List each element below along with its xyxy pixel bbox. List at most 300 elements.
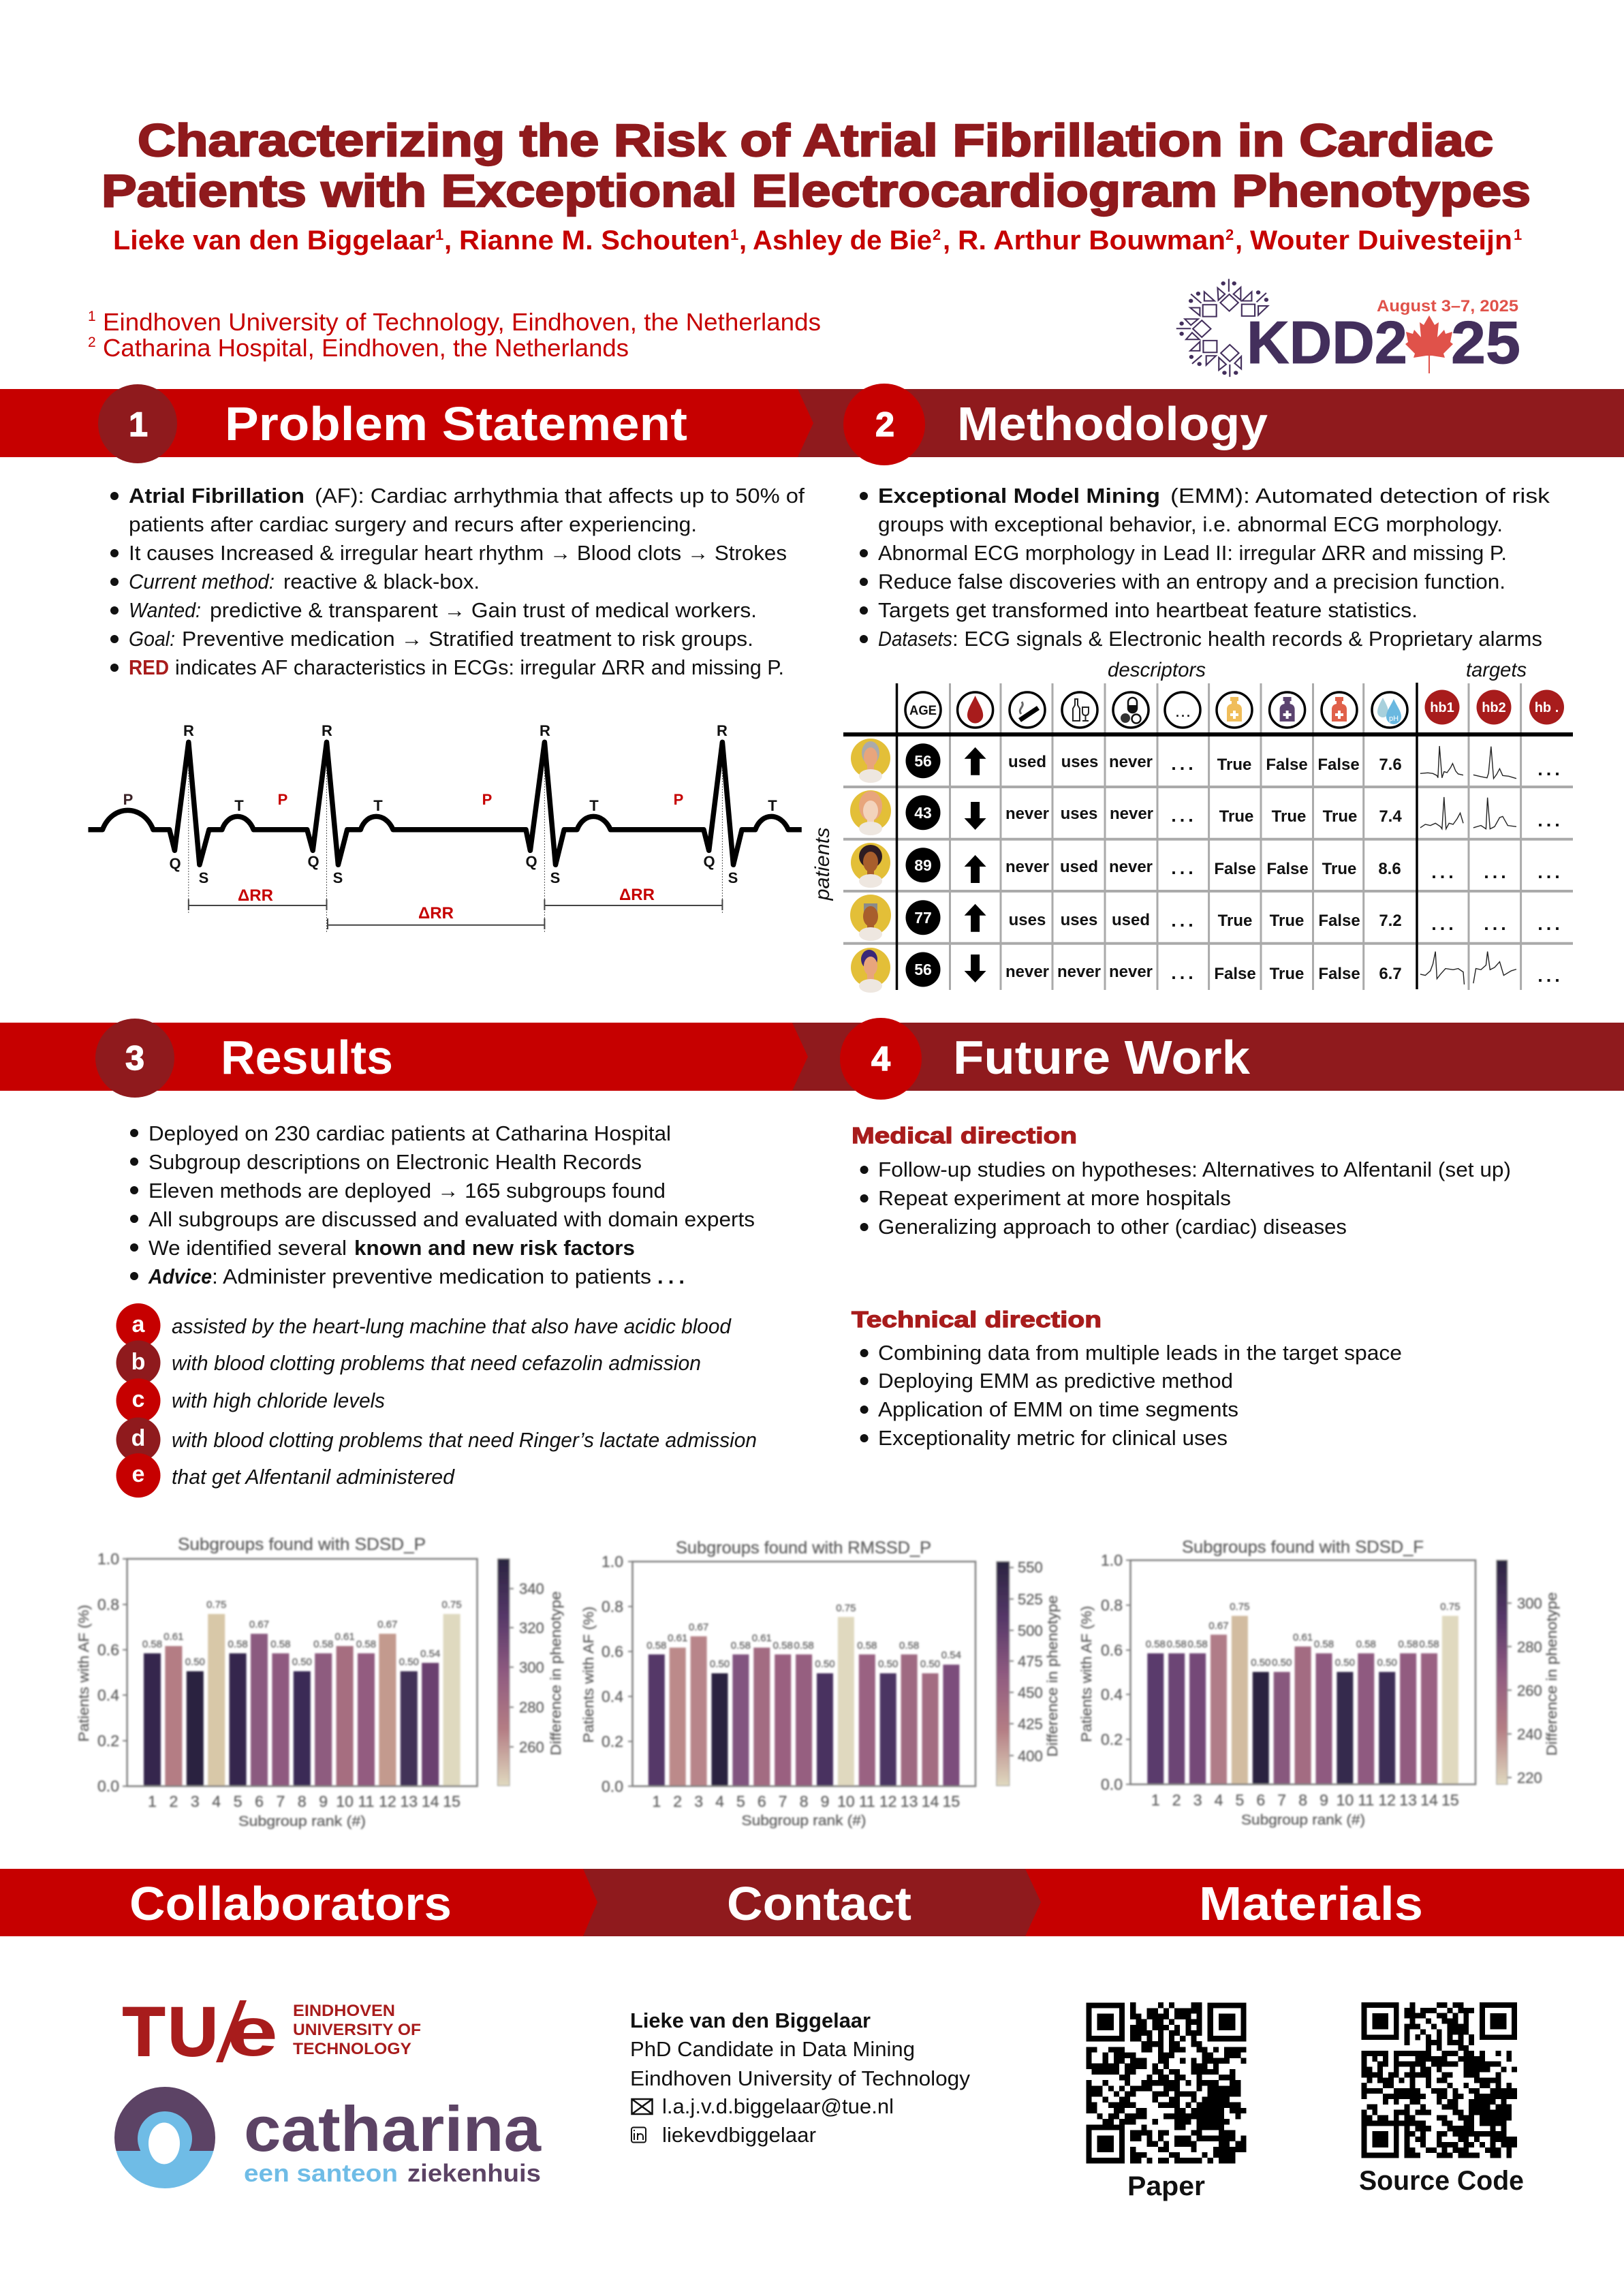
bar chart: SDSD_P: 3: [191, 1793, 200, 1810]
bar chart: RMSSD_P: 9: [821, 1793, 829, 1810]
bar chart: RMSSD_P: 0.54: [941, 1649, 961, 1661]
bar chart: SDSD_P: 0.50: [185, 1656, 205, 1668]
title: [102, 115, 1531, 217]
bar chart: SDSD_F: 260: [1517, 1682, 1542, 1699]
text block: problem statement bullets: [110, 484, 805, 679]
bar chart: RMSSD_P: 0.61: [752, 1632, 772, 1644]
descriptor values: 7.6: [1379, 756, 1402, 774]
medical direction bullets: Repeat experiment at more hospitals: [878, 1186, 1231, 1210]
age badges: [906, 743, 940, 987]
text block: problem statement bullets: Atrial Fibrillation: [129, 484, 304, 508]
bar chart: SDSD_P: 0.54: [420, 1648, 440, 1660]
authors: ,: [943, 226, 950, 255]
title: Characterizing the Risk of Atrial Fibrillation in Cardiac: [138, 115, 1493, 166]
bar chart: SDSD_F: 10: [1337, 1791, 1354, 1809]
target badges: hb .: [1535, 700, 1559, 715]
bar chart: RMSSD_P: 0.58: [857, 1640, 877, 1651]
bar chart: RMSSD_P: 10: [837, 1793, 855, 1810]
QR code: Source Code: [1359, 2002, 1524, 2196]
wave labels: R: [322, 722, 332, 739]
bar chart: SDSD_F: 4: [1215, 1791, 1223, 1809]
item c: c: [132, 1386, 144, 1412]
icon: age: [905, 692, 941, 728]
age badges: 77: [914, 909, 932, 927]
bar chart: RMSSD_P: 0.2: [602, 1733, 623, 1750]
bar chart: SDSD_P: 0.2: [97, 1732, 119, 1750]
bar chart: RMSSD_P: 1.0: [602, 1553, 623, 1570]
text block: problem statement bullets: indicates AF characteristics in ECGs: irregular ΔRR and missing P.: [175, 655, 784, 679]
bar chart: SDSD_F: Difference in phenotype: [1544, 1592, 1560, 1756]
text block: methodology bullets: Datasets: [878, 627, 952, 651]
bar chart: RMSSD_P: 0.58: [794, 1640, 814, 1651]
bar chart: SDSD_F: 0.58: [1419, 1639, 1439, 1650]
text block: problem statement bullets: patients after cardiac surgery and recurs after experiencing.: [129, 512, 697, 536]
badge 1: [98, 384, 177, 463]
table grid: [843, 683, 1573, 990]
text block: results bullets: [130, 1121, 755, 1288]
ellipsis cells: ...: [1537, 914, 1563, 934]
badge 2: 2: [875, 405, 894, 444]
icon: email: [632, 2099, 653, 2114]
descriptor values: False: [1214, 965, 1256, 983]
descriptor values: never: [1110, 805, 1153, 823]
wave labels: R: [717, 722, 728, 739]
bar chart: SDSD_F: 2: [1172, 1791, 1181, 1809]
bar chart: RMSSD_P: 3: [694, 1793, 703, 1810]
bar chart: SDSD_P: 0.0: [97, 1778, 119, 1795]
list: risk groups a to e: [116, 1303, 757, 1498]
icon: linkedin: [631, 2127, 646, 2142]
bar chart: SDSD_P: 9: [319, 1793, 328, 1810]
icon: patient 3: [851, 843, 890, 888]
wave labels: P: [123, 791, 133, 808]
item a: a: [132, 1312, 146, 1337]
descriptor values: never: [1057, 963, 1101, 981]
heading: Results: Results: [221, 1031, 393, 1084]
text block: contact details: PhD Candidate in Data Mining: [630, 2037, 915, 2061]
bar chart: SDSD_P: 0.50: [399, 1656, 419, 1668]
bar chart: SDSD_F: 12: [1378, 1791, 1396, 1809]
medical direction bullets: Generalizing approach to other (cardiac) diseases: [878, 1215, 1347, 1239]
bar chart: SDSD_F: 14: [1420, 1791, 1438, 1809]
text block: results bullets: Subgroup descriptions on Electronic Health Records: [149, 1150, 642, 1174]
table headings: [811, 659, 1527, 901]
icon: patient 4: [850, 895, 891, 941]
bar chart: SDSD_P: 0.75: [441, 1599, 462, 1611]
bar chart: RMSSD_P: 0.58: [646, 1640, 666, 1651]
text block: problem statement bullets: Current method:: [129, 570, 275, 593]
wave labels: T: [768, 797, 777, 814]
logo: KDD 2025: [1176, 279, 1520, 377]
bar chart: SDSD_P: 0.4: [97, 1686, 119, 1704]
bar chart: SDSD_P: 11: [358, 1793, 374, 1810]
text block: contact details: l.a.j.v.d.biggelaar@tue.nl: [662, 2094, 894, 2118]
target badges: hb2: [1482, 700, 1506, 715]
bar chart: SDSD_P: 6: [255, 1793, 264, 1810]
authors: Ashley de Bie: [753, 226, 932, 255]
item d: [116, 1417, 757, 1462]
bar chart: SDSD_P: 260: [519, 1739, 544, 1756]
icon: bottle and glass: [1062, 692, 1097, 728]
text block: results bullets: Advice: [148, 1265, 212, 1288]
bar chart: RMSSD_P: 7: [779, 1793, 787, 1810]
bar chart: SDSD_F: 0.75: [1440, 1601, 1461, 1613]
bar chart: SDSD_F: 8: [1298, 1791, 1307, 1809]
bar chart: SDSD_P: 4: [212, 1793, 221, 1810]
descriptor values: never: [1109, 753, 1153, 771]
affiliations: [88, 308, 821, 362]
authors: 1: [730, 226, 738, 243]
ellipsis cells: ...: [1171, 858, 1197, 878]
icon: pH drops: [1372, 692, 1407, 728]
bar chart: SDSD_F: 0.58: [1314, 1639, 1334, 1650]
bar chart: SDSD_P: 340: [519, 1581, 544, 1597]
descriptor values: True: [1322, 860, 1356, 878]
wave labels: Q: [307, 853, 319, 870]
text block: problem statement bullets: predictive & transparent → Gain trust of medical workers.: [210, 598, 757, 622]
bar chart: SDSD_F: 0.4: [1101, 1686, 1123, 1703]
item b: b: [131, 1349, 145, 1375]
bar chart: SDSD_F: 5: [1236, 1791, 1244, 1809]
icon: red medicine bottle: [1322, 692, 1357, 728]
authors: ,: [444, 226, 452, 255]
bar chart: RMSSD_P: 425: [1018, 1716, 1043, 1733]
badge 4: [840, 1018, 922, 1100]
age badges: 56: [914, 752, 932, 770]
heading: Collaborators: Collaborators: [129, 1877, 452, 1930]
bar chart: RMSSD_P: 14: [922, 1793, 939, 1810]
descriptor values: [1005, 753, 1402, 983]
item d: d: [131, 1425, 145, 1451]
bar chart: SDSD_F: 0.50: [1335, 1657, 1355, 1669]
bar chart: SDSD_P: 280: [519, 1699, 544, 1716]
icon: maple leaf: [1405, 315, 1453, 373]
bar chart: SDSD_F: 0.6: [1101, 1641, 1123, 1659]
authors: 2: [1225, 226, 1234, 243]
descriptor values: True: [1270, 912, 1304, 930]
bar chart: SDSD_F: 0.8: [1101, 1596, 1123, 1614]
badge 3: [95, 1019, 174, 1098]
logo: Catharina hospital: [114, 2087, 542, 2188]
icon: age: AGE: [909, 704, 937, 718]
technical direction bullets: Deploying EMM as predictive method: [878, 1369, 1233, 1393]
ECG trace: [89, 742, 802, 865]
descriptor values: used: [1060, 858, 1098, 876]
descriptor values: 8.6: [1378, 860, 1401, 878]
authors: [113, 226, 1522, 255]
age badges: 89: [914, 856, 932, 874]
wave labels: S: [550, 869, 560, 886]
descriptor values: True: [1219, 807, 1253, 826]
technical direction bullets: Application of EMM on time segments: [878, 1397, 1238, 1421]
bar chart: RMSSD_P: 400: [1018, 1748, 1043, 1765]
descriptor values: uses: [1061, 911, 1097, 929]
icon: Catharina mark: [114, 2087, 215, 2188]
bar chart: RMSSD_P: 0.50: [815, 1658, 835, 1670]
tagline: ziekenhuis: [407, 2159, 541, 2187]
heading: Contact: Contact: [727, 1877, 911, 1930]
icon: purple medicine bottle: [1270, 692, 1305, 728]
authors: R. Arthur Bouwman: [958, 226, 1225, 255]
text block: contact details: [630, 2008, 970, 2147]
technical direction bullets: Exceptionality metric for clinical uses: [878, 1426, 1228, 1450]
year digits: 25: [1451, 309, 1520, 376]
bar chart: SDSD_F: 0.58: [1398, 1639, 1418, 1650]
technical direction bullets: [860, 1341, 1402, 1450]
bar chart: SDSD_P: Subgroups found with SDSD_P: [178, 1535, 426, 1554]
title: Patients with Exceptional Electrocardiogram Phenotypes: [102, 166, 1531, 217]
wave labels: S: [728, 869, 738, 886]
authors: Lieke van den Biggelaar: [113, 226, 435, 255]
bar chart: SDSD_P: 0.75: [206, 1599, 226, 1611]
bar chart: SDSD_F: Subgroup rank (#): [1241, 1812, 1365, 1828]
wave labels: P: [278, 791, 287, 808]
bar chart: SDSD_F: 220: [1517, 1769, 1542, 1786]
authors: ,: [739, 226, 747, 255]
icon: patient 5: [851, 948, 890, 993]
bar chart: SDSD_P: 0.50: [292, 1656, 312, 1668]
text block: results bullets: ...: [657, 1265, 685, 1288]
wave labels: Q: [703, 853, 715, 870]
wave labels: P: [482, 791, 492, 808]
icon: other descriptors: ...: [1176, 706, 1192, 719]
icon: KDD snowflake mark: [1176, 279, 1268, 377]
ellipsis cells: ...: [1171, 963, 1197, 983]
target badges: [1425, 689, 1564, 725]
bar chart: RMSSD_P: 550: [1018, 1559, 1043, 1576]
direction arrows: [965, 747, 986, 982]
bar chart: RMSSD_P: 8: [800, 1793, 808, 1810]
text block: problem statement bullets: Goal:: [129, 627, 175, 651]
heading: Materials: Materials: [1199, 1877, 1423, 1930]
icon: yellow medicine bottle: [1217, 692, 1252, 728]
descriptor values: True: [1218, 912, 1252, 930]
bar chart: SDSD_P: 1: [148, 1793, 157, 1810]
wave labels: T: [234, 797, 244, 814]
bar chart: SDSD_P: 0.58: [142, 1639, 162, 1650]
bar chart: SDSD_P: 7: [277, 1793, 285, 1810]
section band: Collaborators, Contact, Materials: [0, 1869, 1624, 1936]
bar chart: SDSD_F: 0.50: [1251, 1657, 1270, 1669]
text block: results bullets: We identified several: [149, 1236, 347, 1260]
bar chart: SDSD_P: 12: [379, 1793, 396, 1810]
bar chart: SDSD_P: [76, 1535, 564, 1829]
bar chart: SDSD_P: 0.58: [228, 1639, 248, 1650]
bar chart: RMSSD_P: 0.6: [602, 1643, 623, 1660]
item e: e: [132, 1461, 144, 1487]
icon: cigarette: [1010, 692, 1045, 728]
item b: with blood clotting problems that need cefazolin admission: [172, 1351, 701, 1375]
bar chart: SDSD_F: 6: [1256, 1791, 1265, 1809]
bar chart: SDSD_F: 7: [1277, 1791, 1286, 1809]
bar chart: SDSD_F: 0.58: [1356, 1639, 1376, 1650]
ellipsis cells: ...: [1537, 965, 1563, 986]
bar chart: RMSSD_P: 0.58: [899, 1640, 919, 1651]
KDD wordmark: KDD2: [1247, 309, 1407, 376]
heading: technical direction: Technical direction: [852, 1307, 1102, 1332]
descriptor values: used: [1112, 911, 1150, 929]
bar chart: SDSD_P: 0.6: [97, 1641, 119, 1658]
bar chart: RMSSD_P: 0.8: [602, 1598, 623, 1615]
text block: contact details: liekevdbiggelaar: [662, 2123, 816, 2147]
bar chart: SDSD_F: 0.2: [1101, 1731, 1123, 1748]
RR interval brackets: ΔRR: [238, 886, 273, 905]
descriptor values: False: [1266, 860, 1309, 878]
bar chart: SDSD_P: 8: [298, 1793, 307, 1810]
heading: Problem Statement: Problem Statement: [225, 397, 687, 450]
bar chart: RMSSD_P: 0.0: [602, 1778, 623, 1795]
logo: TU/e: TECHNOLOGY: [293, 2040, 411, 2058]
target badges: hb1: [1430, 700, 1454, 715]
bar chart: SDSD_P: 0.61: [163, 1631, 184, 1643]
bar chart: SDSD_F: 240: [1517, 1726, 1542, 1743]
bar chart: SDSD_P: 2: [170, 1793, 178, 1810]
icon: pH drops: pH: [1389, 715, 1399, 723]
bar chart: RMSSD_P: Difference in phenotype: [1045, 1596, 1061, 1756]
text block: methodology bullets: Targets get transformed into heartbeat feature statistics.: [878, 598, 1418, 622]
bar chart: SDSD_F: 1.0: [1101, 1551, 1123, 1569]
bar chart: SDSD_P: Difference in phenotype: [548, 1592, 564, 1755]
bar chart: RMSSD_P: 475: [1018, 1653, 1043, 1670]
authors: Rianne M. Schouten: [459, 226, 730, 255]
bar chart: RMSSD_P: 0.4: [602, 1688, 623, 1705]
wordmark: catharina: [244, 2093, 542, 2165]
ellipsis cells: ...: [1484, 862, 1510, 882]
text block: problem statement bullets: It causes Increased & irregular heart rhythm → Blood clots → Strokes: [129, 541, 787, 565]
affiliations: 1: [88, 309, 96, 324]
affiliations: 2: [88, 335, 96, 350]
logo: TU/e: [123, 1993, 421, 2070]
text block: results bullets: All subgroups are discussed and evaluated with domain experts: [149, 1207, 755, 1231]
item d: with blood clotting problems that need Ringer’s lactate admission: [172, 1428, 757, 1452]
wave labels: Q: [169, 855, 181, 872]
affiliations: Eindhoven University of Technology, Eindhoven, the Netherlands: [103, 308, 821, 336]
logo: TU/e: e: [227, 1993, 278, 2070]
badge 2: [843, 384, 925, 465]
badge 4: 4: [871, 1040, 890, 1078]
bar chart: RMSSD_P: 0.50: [710, 1658, 730, 1670]
bar chart: SDSD_F: 0.75: [1230, 1601, 1250, 1613]
ellipsis cells: ...: [1171, 910, 1197, 931]
bar chart: RMSSD_P: 450: [1018, 1684, 1043, 1701]
ellipsis cells: ...: [1431, 914, 1457, 934]
wave labels: T: [373, 797, 383, 814]
icon: blood acidity drop: [958, 692, 993, 728]
bar chart: RMSSD_P: 0.67: [689, 1622, 708, 1633]
bar chart: RMSSD_P: 5: [736, 1793, 745, 1810]
medical direction bullets: [860, 1158, 1511, 1239]
wave labels: S: [333, 869, 343, 886]
table headings: descriptors: [1108, 659, 1206, 681]
bar chart: SDSD_F: 3: [1193, 1791, 1202, 1809]
bar chart: SDSD_F: 300: [1517, 1595, 1542, 1612]
bar chart: RMSSD_P: Subgroup rank (#): [741, 1813, 866, 1829]
bar chart: RMSSD_P: Subgroups found with RMSSD_P: [676, 1538, 931, 1557]
descriptor values: False: [1318, 912, 1360, 930]
descriptor values: uses: [1061, 805, 1097, 823]
bar chart: SDSD_P: 0.58: [313, 1639, 333, 1650]
icon: pills: [1113, 692, 1149, 728]
bar chart: SDSD_P: 0.67: [249, 1619, 269, 1630]
table headings: targets: [1466, 659, 1527, 681]
bar chart: RMSSD_P: 500: [1018, 1622, 1043, 1639]
wave labels: S: [199, 869, 208, 886]
bar chart: RMSSD_P: 11: [859, 1793, 875, 1810]
icon: other descriptors: [1165, 692, 1200, 728]
text block: problem statement bullets: reactive & black-box.: [283, 570, 480, 593]
descriptor values: never: [1005, 858, 1049, 876]
text block: future work: [852, 1123, 1511, 1450]
descriptor values: uses: [1009, 911, 1046, 929]
text block: methodology bullets: (EMM): Automated detection of risk: [1170, 484, 1550, 508]
descriptor values: uses: [1061, 753, 1098, 771]
bar chart: SDSD_F: 0.58: [1167, 1639, 1187, 1650]
bar chart: RMSSD_P: 15: [943, 1793, 960, 1810]
heading: medical direction: Medical direction: [852, 1123, 1077, 1148]
bar chart: SDSD_F: 0.58: [1187, 1639, 1208, 1650]
heartbeat sparklines: [1420, 746, 1516, 984]
descriptor values: True: [1323, 807, 1357, 826]
wave labels: P: [674, 791, 683, 808]
descriptor values: never: [1109, 963, 1153, 981]
item a: assisted by the heart-lung machine that also have acidic blood: [172, 1314, 732, 1338]
bar chart: SDSD_P: 0.58: [270, 1639, 291, 1650]
technical direction bullets: Combining data from multiple leads in the target space: [878, 1341, 1402, 1365]
bar chart: RMSSD_P: 4: [715, 1793, 724, 1810]
wave labels: Q: [525, 853, 537, 870]
bar chart: SDSD_F: 0.0: [1101, 1775, 1123, 1793]
item e: [116, 1453, 456, 1498]
bar chart: SDSD_F: 1: [1151, 1791, 1160, 1809]
descriptor values: False: [1318, 965, 1360, 983]
ellipsis cells: ...: [1537, 862, 1563, 882]
bar chart: SDSD_P: 0.58: [356, 1639, 376, 1650]
descriptor values: used: [1008, 753, 1046, 771]
age badges: 43: [914, 804, 932, 822]
bar chart: SDSD_F: 0.50: [1272, 1657, 1292, 1669]
item a: [116, 1303, 732, 1348]
heading: Methodology: Methodology: [957, 397, 1268, 450]
text block: problem statement bullets: Preventive medication → Stratified treatment to risk groups.: [182, 627, 753, 651]
wave labels: R: [540, 722, 550, 739]
text block: methodology bullets: : ECG signals & Electronic health records & Proprietary alarms: [952, 627, 1542, 651]
bar chart: SDSD_F: [1079, 1538, 1560, 1828]
bar chart: SDSD_F: 9: [1320, 1791, 1328, 1809]
text block: results bullets: known and new risk factors: [354, 1236, 635, 1260]
text block: results bullets: Eleven methods are deployed → 165 subgroups found: [149, 1179, 666, 1203]
ellipsis cells: [1171, 754, 1563, 986]
authors: 2: [933, 226, 941, 243]
bar chart: SDSD_P: Patients with AF (%): [76, 1605, 92, 1741]
RR interval brackets: [189, 886, 722, 929]
conference date: August 3–7, 2025: [1377, 297, 1518, 315]
bar chart: SDSD_P: 15: [443, 1793, 460, 1810]
affiliations: Catharina Hospital, Eindhoven, the Netherlands: [103, 334, 629, 362]
bar chart: SDSD_F: 0.50: [1377, 1657, 1397, 1669]
section band: Problem Statement and Methodology: [0, 384, 1624, 465]
ellipsis cells: ...: [1171, 805, 1197, 826]
descriptor values: never: [1005, 963, 1049, 981]
descriptor values: True: [1270, 965, 1304, 983]
bar chart: SDSD_P: Subgroup rank (#): [238, 1814, 366, 1829]
descriptor values: False: [1266, 756, 1308, 774]
item c: [116, 1378, 385, 1423]
authors: Wouter Duivesteijn: [1250, 226, 1512, 255]
authors: 1: [435, 226, 443, 243]
text block: problem statement bullets: (AF): Cardiac arrhythmia that affects up to 50% of: [315, 484, 805, 508]
bar chart: SDSD_P: 300: [519, 1659, 544, 1676]
text block: methodology bullets: Abnormal ECG morphology in Lead II: irregular ΔRR and missing P.: [878, 541, 1507, 565]
